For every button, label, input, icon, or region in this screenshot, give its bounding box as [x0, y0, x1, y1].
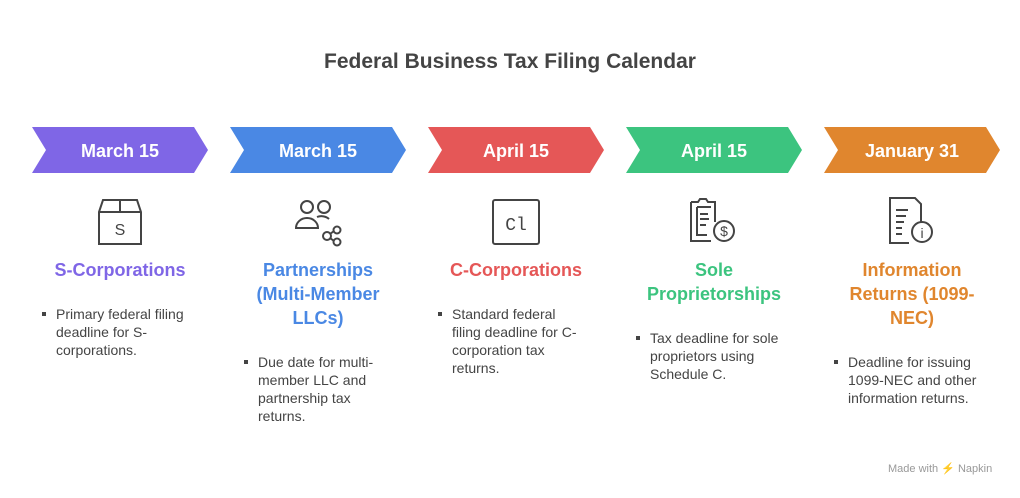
bullet: Sole Proprietorships: Tax deadline for sole proprietors using Schedule C. [650, 330, 778, 382]
icon: clipboard dollar [691, 199, 734, 241]
arrow: March 15 S-corp: March 15 [81, 141, 159, 161]
bullet: C-Corporations: Standard federal filing deadline for C-corporation tax returns. [452, 306, 577, 376]
arrow: March 15 partnerships [230, 127, 406, 173]
arrow: April 15 sole: April 15 [681, 141, 747, 161]
arrow: January 31 [824, 127, 1000, 173]
icon: CI box: Cl [505, 216, 527, 236]
arrow: March 15 S-corp [32, 127, 208, 173]
icon: box S: S [115, 222, 125, 239]
bullet: Information Returns: Deadline for issuing 1099-NEC and other information returns. [848, 354, 976, 406]
icon: box S [99, 200, 141, 244]
arrow: March 15 partnerships: March 15 [279, 141, 357, 161]
heading: Information Returns: Information Returns (1099-NEC) [849, 260, 975, 328]
title: Federal Business Tax Filing Calendar [324, 50, 696, 73]
arrow: April 15 sole [626, 127, 802, 173]
heading: S-Corporations: S-Corporations [54, 260, 186, 280]
arrow: January 31: January 31 [865, 141, 959, 161]
heading: C-Corporations: C-Corporations [450, 260, 582, 280]
bullet: Partnerships: Due date for multi-member LLC and partnership tax returns. [258, 354, 373, 424]
arrow: April 15 C-corp [428, 127, 604, 173]
arrow: April 15 C-corp: April 15 [483, 141, 549, 161]
icon: CI box [493, 200, 539, 244]
footer credit: Made with ⚡ Napkin [888, 463, 992, 475]
icon: clipboard dollar: $ [720, 223, 728, 239]
icon: document info [890, 198, 932, 243]
bullet: S-Corporations: Primary federal filing deadline for S-corporations. [56, 306, 184, 358]
heading: Partnerships: Partnerships (Multi-Member LLCs) [256, 260, 380, 328]
icon: document info: i [920, 225, 924, 241]
icon: people share [296, 201, 340, 246]
heading: Sole Proprietorships: Sole Proprietorships [647, 260, 781, 304]
